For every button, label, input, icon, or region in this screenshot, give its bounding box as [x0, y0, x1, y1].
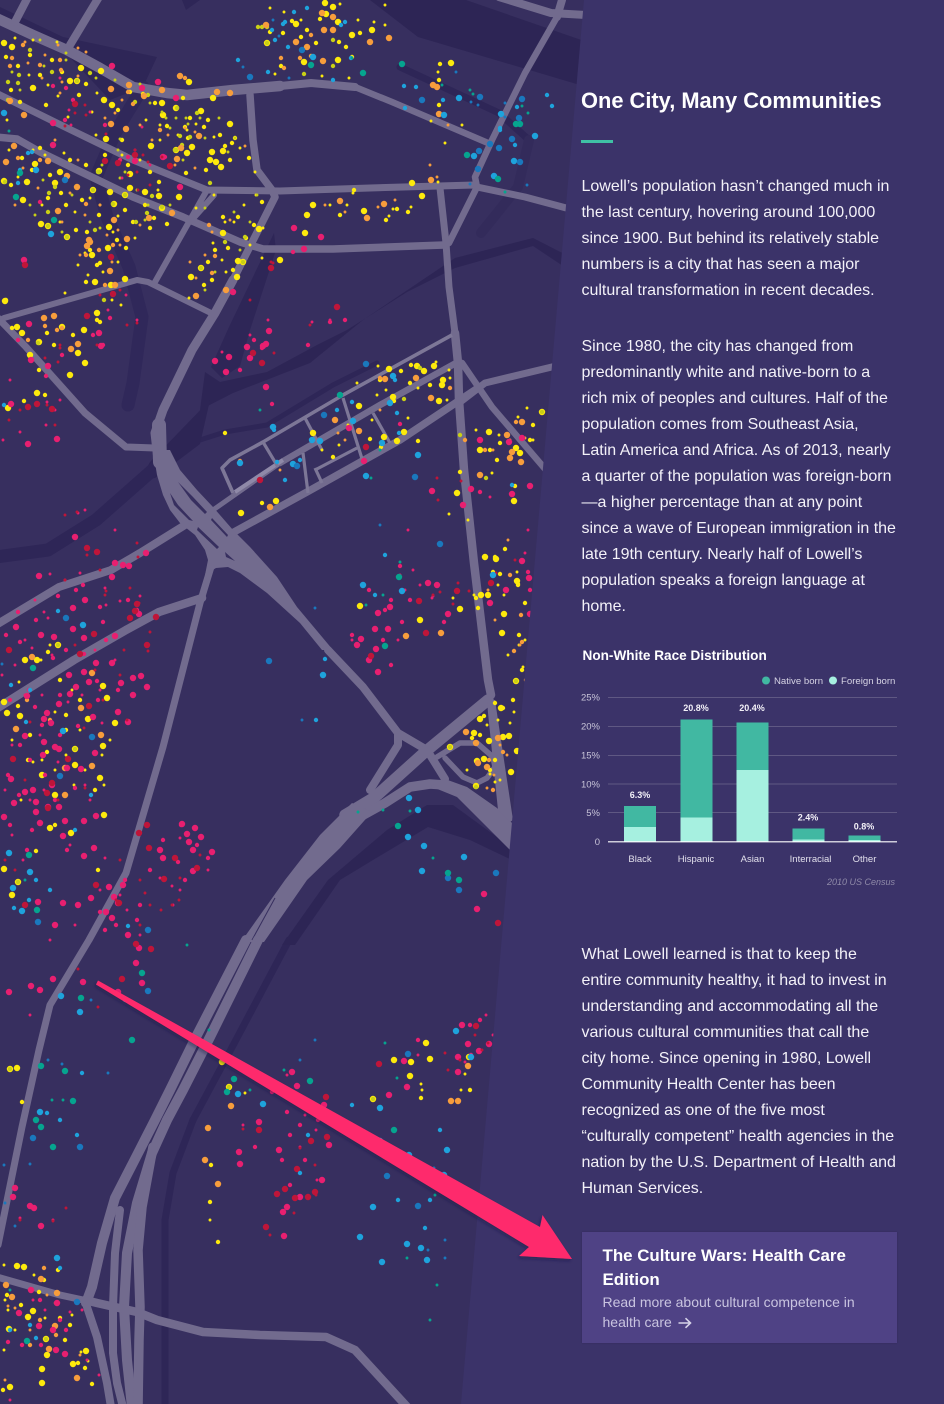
category labels: [628, 854, 876, 865]
text block: cultural competence paragraph: various cultural communities that call the: [582, 1024, 869, 1041]
callout card: related article link: [582, 1232, 897, 1343]
chart title: Non-White Race Distribution: [582, 648, 767, 663]
text block: demographic change paragraph: —a higher percentage than at any point: [582, 494, 862, 511]
card headline: [602, 1246, 846, 1289]
interchange north: [153, 450, 333, 650]
text block: demographic change paragraph: [582, 338, 896, 615]
text block: cultural competence paragraph: recognized as one of the five most: [582, 1102, 825, 1119]
value labels: [630, 703, 874, 832]
text block: cultural competence paragraph: [582, 946, 896, 1197]
text block: intro paragraph: the last century, hovering around 100,000: [582, 204, 875, 221]
text block: demographic change paragraph: late 19th century. Nearly half of Lowell’s: [582, 546, 862, 563]
text block: intro paragraph: [582, 178, 889, 299]
accent rule: [581, 140, 613, 143]
text block: cultural competence paragraph: entire community healthy, it had to invest in: [582, 972, 887, 989]
text block: intro paragraph: since 1900. But behind its relatively stable: [582, 230, 879, 247]
text block: demographic change paragraph: a quarter of the population was foreign-born: [582, 468, 891, 485]
category labels: Interracial: [790, 854, 831, 865]
interchange south: [345, 700, 488, 815]
text block: cultural competence paragraph: “culturally competent” health agencies in the: [582, 1128, 894, 1145]
text block: cultural competence paragraph: What Lowell learned is that to keep the: [582, 946, 857, 963]
legend: Foreign born: [841, 676, 895, 687]
text block: demographic change paragraph: Latin America and Africa. As of 2013, nearly: [582, 442, 891, 459]
text block: cultural competence paragraph: understanding and accommodating all the: [582, 998, 878, 1015]
value labels: 20.4%: [739, 703, 765, 713]
text block: cultural competence paragraph: nation by the U.S. Department of Health and: [582, 1154, 896, 1171]
value labels: 2.4%: [798, 812, 818, 822]
category labels: Black: [628, 854, 652, 865]
text block: cultural competence paragraph: city home. Since opening in 1980, Lowell: [582, 1050, 871, 1067]
text block: intro paragraph: Lowell’s population hasn’t changed much in: [582, 178, 889, 195]
text block: demographic change paragraph: population comes from Southeast Asia,: [582, 416, 859, 433]
value labels: 0.8%: [854, 822, 874, 832]
text block: cultural competence paragraph: Human Services.: [582, 1180, 703, 1197]
bars: [608, 720, 897, 842]
category labels: Hispanic: [678, 854, 714, 865]
value labels: 20.8%: [683, 703, 709, 713]
category labels: Asian: [741, 854, 764, 865]
text block: demographic change paragraph: Since 1980, the city has changed from: [582, 338, 853, 355]
category labels: Other: [853, 854, 876, 865]
text block: intro paragraph: numbers is a city that has seen a major: [582, 256, 859, 273]
card headline: The Culture Wars: Health Care: [602, 1246, 846, 1265]
gridlines and y axis: 20%: [581, 722, 601, 732]
water: rivers and canals: [0, 0, 590, 1404]
text block: demographic change paragraph: since a wave of European immigration in the: [582, 520, 896, 537]
text block: demographic change paragraph: rich mix of peoples and cultures. Half of the: [582, 390, 888, 407]
card subtext with arrow: Read more about cultural competence in: [602, 1294, 855, 1310]
road network: [0, 0, 586, 1404]
title: One City, Many Communities: [581, 88, 882, 113]
card subtext with arrow: health care: [602, 1314, 672, 1330]
text block: cultural competence paragraph: Community Health Center has been: [582, 1076, 836, 1093]
card subtext with arrow: [602, 1294, 855, 1330]
legend: Native born: [774, 676, 823, 687]
value labels: 6.3%: [630, 790, 650, 800]
gridlines and y axis: 10%: [581, 780, 601, 790]
text block: demographic change paragraph: population speaks a foreign language at: [582, 572, 865, 589]
gridlines and y axis: 5%: [586, 808, 601, 819]
gridlines and y axis: 15%: [581, 750, 601, 762]
text block: demographic change paragraph: home.: [582, 598, 626, 615]
legend: [762, 676, 895, 687]
card headline: Edition: [602, 1270, 660, 1289]
gridlines and y axis: 25%: [581, 692, 601, 704]
text block: demographic change paragraph: predominantly white and native-born to a: [582, 364, 870, 381]
population dots by ethnicity: [2, 3, 552, 1400]
text block: intro paragraph: cultural transformation in recent decades.: [582, 282, 875, 299]
gridlines and y axis: 0: [595, 837, 600, 848]
gridlines and y axis: [581, 692, 897, 848]
source note: 2010 US Census: [826, 877, 895, 887]
